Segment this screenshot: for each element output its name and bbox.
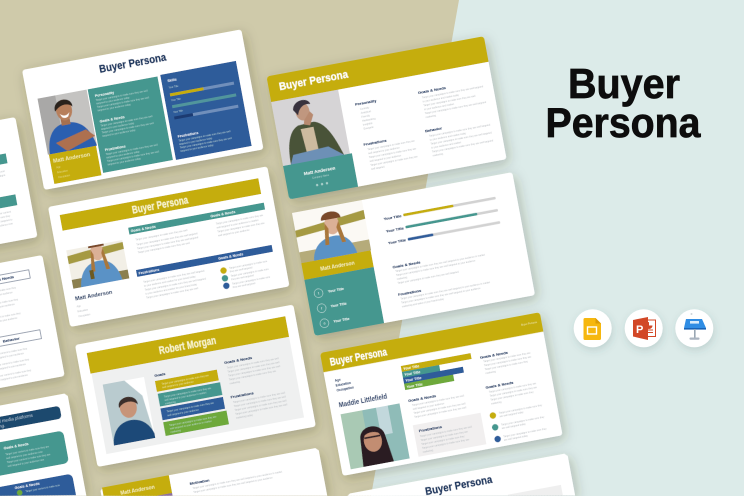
slide: gold header, man in jacket: [266, 36, 507, 199]
text: goals right top: Target your campaigns to make sure they: [485, 360, 529, 371]
goal box blue: well targeted to your audience: [167, 408, 200, 417]
text: goals lists: Target your campaigns to make sure they are well: [138, 242, 190, 254]
text: goals and needs: Goals & Needs: [224, 355, 253, 365]
photo: man in green jacket: [271, 90, 350, 166]
teal sidebar with social links: Your Title: [333, 317, 350, 324]
gray content panel: [91, 337, 304, 454]
text: frustrations: [143, 269, 208, 300]
panel: skills bars and frustrations: targeted to your audience today: [180, 144, 215, 153]
text: frustrations: Target your campaigns to make sure they are well targeted: [145, 277, 207, 292]
panel: frustrations: Target your campaigns to make sure they: [421, 435, 466, 446]
text: frustrations: Target your campaigns to make sure they are well: [233, 391, 286, 404]
goal box gold: well targeted to your audience: [162, 380, 195, 389]
panel: frustrations: marketing: [423, 449, 434, 454]
panel: skills bars and frustrations: Your Title: [168, 85, 179, 90]
panel: skills bars and frustrations: Frustrations: [177, 131, 199, 139]
header band with title: [60, 178, 261, 231]
goal box teal: [158, 382, 222, 407]
stacked bars: Your Title: [405, 376, 422, 383]
teal sidebar with social links: Your Title: [328, 287, 344, 294]
goal box green: well targeted to your audience in market: [170, 420, 212, 431]
slide: woman with hat, teal and blue bars: [48, 166, 289, 327]
panel: personality, goals, frustrations: targeted to your audience today: [107, 157, 142, 166]
name and details: Matt Anderson: [75, 290, 113, 303]
text: behavior: marketing: [433, 153, 444, 158]
text: personality: Curiosity: [360, 106, 370, 111]
text: goals and needs: marketing: [425, 114, 437, 119]
text: goals right bottom: Target your campaigns to make sure they are: [489, 386, 538, 398]
stacked bars: Your Title: [403, 364, 420, 371]
details: Education: [335, 381, 351, 388]
panel: frustrations: Frustrations: [418, 424, 443, 433]
panel: frustrations: [413, 413, 486, 457]
text: frustrations: Target your campaigns to make sure they are well: [234, 399, 287, 412]
text: personality: Analytical: [361, 110, 372, 115]
panel: personality, goals, frustrations: Target your campaigns to make sure they are well: [100, 115, 153, 128]
panel: personality, goals, frustrations: targeted to your audience today: [97, 103, 132, 112]
main title: [546, 60, 701, 146]
teal sidebar with social links: [304, 267, 384, 336]
main title: Buyer: [568, 60, 680, 107]
text: personality: [355, 98, 382, 131]
name band: [301, 250, 374, 280]
text: personality: Insightful: [363, 122, 373, 127]
text: frustrations: Target your campaigns to make sure they are well: [234, 395, 286, 408]
text: frustrations: Target your campaigns to make sure they are well: [235, 403, 288, 416]
panel: frustrations: Target your campaigns to make sure they are: [422, 438, 470, 450]
name block: Matt Anderson: [303, 165, 336, 176]
text: frustrations: Target your campaigns to make sure they are well: [146, 287, 199, 300]
icon: Keynote: [675, 309, 713, 347]
icon: PowerPoint: [625, 309, 663, 347]
heading: slide title: Buyer Persona: [329, 346, 389, 369]
text: frustrations: Target your campaigns to make sure they are well targeted: [143, 269, 205, 284]
slide: partial left card with rounded pills: [0, 393, 86, 496]
panel: skills bars and frustrations: Skills: [167, 77, 177, 83]
text: goals right top: [480, 346, 534, 376]
icon: Google Slides: [574, 309, 612, 347]
name band: [102, 475, 172, 496]
teal sidebar with social links: t: [318, 291, 319, 296]
panel: skills bars and frustrations: Target your campaigns to make sure they are well: [180, 137, 232, 150]
text: goals right bottom: [485, 376, 539, 406]
panel: personality, goals, frustrations: targeted to your audience today: [96, 96, 131, 105]
skill bars: Your Title: [383, 213, 403, 221]
header band: [320, 312, 543, 372]
text: goals right top: Target your campaigns to make sure they are: [484, 355, 532, 367]
text: goals and needs: Target your campaigns to make sure they are well targeted to your audience: [396, 259, 476, 277]
text: goals and needs: Target your campaigns to make sure they are well: [227, 357, 279, 370]
text: goals lists: Target your campaigns to make sure they are: [216, 214, 264, 226]
name and details: Education: [77, 308, 89, 313]
teal section bar: Goals & Needs: [130, 225, 156, 233]
text: behavior: to your audience and market: [431, 141, 462, 150]
text: frustrations: Target your campaigns to make sure they are well targeted to your audience in market: [400, 281, 491, 301]
slide: partial left card with rounded pills: well targeted to your audience now: [7, 458, 45, 468]
stacked bars: [401, 353, 475, 390]
name and details: Occupation: [78, 313, 91, 318]
text: goals and needs: Target your campaigns to make sure they are well targeted: [425, 101, 487, 115]
text: goals and needs center: Target your campaigns to make sure they are well: [414, 406, 467, 419]
slide: woman with teal sidebar and skill bars: [292, 172, 535, 336]
name band: Matt Anderson: [320, 260, 355, 273]
numbered list: Target your campaigns to make sure they: [501, 416, 545, 427]
slide: Maddie Littlefield: [320, 312, 563, 476]
skill bars: Your Title: [388, 237, 407, 246]
text: goals and needs: to your audience and market today: [422, 94, 460, 103]
panel: frustrations: Target your campaigns to make sure they are well: [420, 426, 473, 438]
text: goals and needs: [418, 78, 488, 120]
text: goals and needs center: [408, 388, 467, 419]
numbered list: they are well targeted: [230, 266, 253, 273]
goal box teal: well targeted to your audience in market: [164, 391, 207, 402]
text: motivation: [189, 464, 283, 494]
text: goals right top: Goals & Needs: [480, 350, 509, 360]
goal box green: [163, 410, 229, 436]
text: frustrations: Target your campaigns to make sure they are well targeted to your audience: [401, 287, 481, 305]
numbered list: Target your campaigns to make sure they: [499, 404, 543, 415]
skill bars: Your Title: [385, 225, 405, 233]
panel: personality, goals, frustrations: targeted to your audience today: [102, 129, 137, 138]
panel: skills bars and frustrations: targeted to your audience today: [179, 137, 213, 146]
text: frustrations: well targeted to your audience: [368, 146, 401, 155]
text: frustrations: Target your campaigns to make sure they are: [369, 147, 417, 159]
text: behavior: Target your campaigns to make sure they are well targeted: [432, 139, 494, 154]
slide: Robert Morgan: [75, 305, 316, 467]
panel: personality, goals, frustrations: Frustrations: [105, 144, 126, 152]
text: goals lists: Target your campaigns to make sure they are well targeted: [136, 232, 198, 247]
goal box blue: [160, 397, 225, 420]
goal box green: marketing: [170, 429, 182, 434]
numbered list: are well targeted today: [499, 411, 524, 418]
text: motivation: Motivation: [189, 477, 210, 486]
text: goals lists: Target your campaigns to make sure they are well: [135, 229, 188, 242]
main title: Persona: [546, 99, 701, 146]
details: Age: [334, 378, 341, 383]
name block: Occupation: [58, 174, 71, 179]
text: behavior: Behavior: [425, 125, 443, 133]
skill bars: [383, 196, 501, 246]
text: behavior: to your audience and market today: [430, 132, 467, 142]
text: goals lists: [135, 214, 267, 254]
text: personality: Energetic: [363, 126, 375, 131]
text: frustrations: well targeted to your audience: [369, 154, 402, 163]
name and details: Age: [76, 305, 82, 308]
text: goals and needs: [224, 350, 282, 386]
text: frustrations: well targeted: [371, 165, 385, 171]
text: goals and needs: to your audience and market: [424, 103, 455, 111]
photo strip: [156, 493, 173, 496]
goal box gold: [155, 370, 219, 392]
slide: partial left card with outlined boxes: Behavior: [2, 336, 20, 344]
text: goals and needs center: Goals & Needs: [408, 393, 437, 403]
panel: personality, goals, frustrations: Target your campaigns to make sure they are well: [96, 89, 148, 102]
text: goals and needs: Target your campaigns to make sure they are well targeted to your audience in market: [395, 254, 486, 273]
text: goals lists: well targeted to your audience in market: [216, 219, 259, 230]
panel: personality, goals, frustrations: Target your campaigns to make sure they are well: [102, 122, 154, 134]
goal box blue: Target your campaigns to make sure they are: [166, 402, 215, 413]
blue section bar: Goals & Needs: [218, 252, 244, 261]
small header caption: Buyer Persona: [521, 321, 538, 327]
stacked bars: Your Title: [406, 382, 423, 389]
text: goals and needs: marketing: [397, 276, 408, 281]
text: goals right bottom: marketing: [491, 401, 502, 406]
text: motivation: Target your campaigns to make sure they are well targeted to your audience: [193, 476, 274, 494]
slide: bottom right card: [347, 453, 575, 496]
text: goals lists: well targeted to your audience: [218, 229, 250, 237]
numbered list: are well targeted today: [502, 423, 527, 430]
teal sidebar with social links: o: [323, 321, 326, 326]
text: personality: Personality: [355, 98, 377, 107]
numbered list: Target your campaigns to make sure: [230, 268, 270, 278]
text: frustrations: Frustrations: [363, 138, 388, 147]
text: goals lists: Target your campaigns to make sure they are: [217, 222, 265, 234]
text: frustrations: Frustrations: [398, 288, 422, 297]
slide: partial left card with rounded pills: Goals & Needs: [14, 482, 40, 490]
header band with name: Robert Morgan: [158, 335, 217, 357]
goals heading: Goals: [154, 371, 167, 378]
blue section bar: [136, 245, 273, 277]
text: behavior: Target your campaigns to make sure they are well targeted: [430, 131, 493, 146]
slide: partial left card with rounded pills: Target your content to make sure they are: [7, 453, 51, 464]
numbered list: [220, 259, 272, 291]
slide: partial left card with rounded pills: Target your content to make sure they are: [5, 445, 50, 456]
name block: Matt Anderson: [53, 152, 91, 165]
text: goals and needs: Target your campaigns to make sure they are: [229, 370, 277, 382]
text: goals and needs center: well targeted to your audience: [413, 402, 445, 411]
numbered list: Target your campaigns to make sure they: [503, 427, 548, 438]
text: personality: Hardworking: [362, 117, 376, 123]
header band with name: [87, 316, 289, 374]
text: goals and needs: Target your campaigns to make sure they are well targeted: [422, 85, 484, 99]
text: frustrations: marketing today: [236, 414, 254, 420]
numbered list: they are well targeted: [231, 274, 255, 281]
text: frustrations: Target your campaigns to make sure they are: [367, 139, 416, 151]
name block: Age: [56, 165, 62, 169]
text: goals and needs: marketing: [229, 380, 241, 385]
slide: partial left card with teal bars: [0, 117, 38, 277]
name block: Company Name: [312, 174, 330, 180]
numbered list: Target your campaigns to make sure: [232, 276, 271, 286]
text: frustrations: to your audience and market for your brand today: [145, 283, 198, 296]
text: frustrations: Frustrations: [230, 390, 255, 399]
numbered list: they are well targeted: [233, 282, 256, 289]
teal sidebar with social links: f: [321, 307, 323, 311]
goal box teal: Target your campaigns to make sure they are: [164, 387, 212, 399]
slide: partial left card with outlined boxes: [0, 255, 65, 416]
panel: skills bars and frustrations: Target your campaigns to make sure they are well: [178, 130, 231, 143]
slide: partial left card with rounded pills: Goals & Needs: [3, 442, 29, 451]
panel: personality, goals, frustrations: [88, 76, 173, 173]
gray panel: [508, 485, 563, 496]
text: frustrations: to your audience and market for your brand today: [144, 275, 197, 288]
text: goals and needs: Goals & Needs: [392, 259, 422, 270]
panel: personality, goals, frustrations: targeted to your audience today: [106, 150, 141, 160]
name block: Education: [57, 169, 69, 174]
text: goals and needs center: Target your campaigns to make sure they are well: [412, 394, 465, 407]
text: goals right bottom: Target your campaigns to make sure they: [490, 391, 535, 402]
header band: [266, 36, 489, 102]
text: frustrations: [363, 133, 419, 171]
photo: laughing woman with hat: [65, 235, 129, 289]
text: goals and needs: Target your campaigns to make sure they are well: [228, 365, 281, 378]
text: goals and needs center: Target your campaigns to make sure they are well: [413, 402, 466, 415]
name block: [49, 146, 102, 184]
goal box gold: Target your campaigns to make sure they are: [161, 374, 210, 386]
slide: bottom card Matt Anderson motivation: [100, 448, 327, 496]
details: Occupation: [336, 385, 354, 393]
photo: woman with hat: [292, 200, 371, 263]
text: goals right bottom: Goals & Needs: [485, 380, 515, 390]
text: goals right top: marketing: [485, 370, 497, 375]
teal sidebar with social links: Your Title: [330, 302, 347, 308]
text: motivation: Target your campaigns to make sure they are well targeted to your audience in market: [192, 470, 283, 490]
text: goals right top: Target your campaigns to make sure they are: [483, 352, 531, 363]
panel: skills bars and frustrations: Your Title: [173, 109, 184, 114]
header band with title: Buyer Persona: [131, 194, 190, 217]
panel: personality, goals, frustrations: Target your campaigns to make sure they are well: [107, 150, 160, 163]
photo: woman with glasses: [341, 403, 410, 469]
heading: slide title: Buyer Persona: [278, 69, 350, 93]
goal box teal: marketing: [165, 401, 177, 406]
panel: personality, goals, frustrations: Target your campaigns to make sure they are well: [97, 96, 150, 109]
photo: man in navy sweater: [103, 377, 156, 446]
slide: man in blue shirt, teal and blue panels: [22, 29, 263, 190]
text: frustrations: [230, 385, 289, 420]
slide: partial left card with rounded pills: Target your content to make sure: [25, 484, 61, 493]
numbered list: are well targeted today: [504, 434, 529, 442]
text: frustrations: marketing and sales of your brand today: [402, 298, 445, 309]
name block: [283, 153, 358, 199]
stacked bars: Your Title: [404, 370, 421, 377]
text: frustrations: Target your campaigns to make sure they are: [370, 155, 419, 167]
teal section bar: [128, 203, 265, 235]
slide: partial left card with rounded pills: well targeted to your audience now: [6, 451, 43, 460]
panel: skills bars and frustrations: Your Title: [171, 97, 182, 102]
teal section bar: Goals & Needs: [210, 210, 236, 219]
text: goals and needs: Target your campaigns to make sure they are well targeted: [397, 271, 460, 285]
heading: slide title: Buyer Persona: [98, 51, 168, 76]
details: [334, 376, 354, 393]
numbered list: Target your campaigns to make sure: [229, 260, 268, 270]
panel: personality, goals, frustrations: Goals & Needs: [99, 115, 125, 124]
panel: skills bars and frustrations: [160, 61, 252, 160]
text: personality: Friendly: [361, 114, 371, 119]
text: goals and needs: Goals & Needs: [418, 85, 447, 95]
panel: personality, goals, frustrations: Personality: [95, 91, 114, 98]
text: goals right bottom: Target your campaigns to make sure they are: [489, 382, 537, 394]
panel: personality, goals, frustrations: targeted to your audience today: [101, 122, 135, 131]
text: goals and needs: Target your campaigns to make sure they are well: [227, 361, 280, 374]
text: goals and needs: [392, 248, 488, 285]
text: frustrations: [398, 275, 492, 309]
numbered list: [489, 403, 548, 444]
text: goals and needs: Target your campaigns to make sure they are well: [423, 95, 476, 107]
text: behavior: Target your campaigns to make sure they are well targeted: [429, 123, 491, 138]
blue section bar: Frustrations: [138, 268, 160, 276]
photo: smiling man arms crossed: [37, 90, 97, 155]
background: light mint diagonal panel: [371, 0, 744, 496]
icon: PowerPoint: P: [636, 324, 643, 336]
text: behavior: [425, 117, 495, 158]
goal box green: Target your campaigns to make sure they are: [169, 415, 217, 427]
text: goals lists: Target your campaigns to make sure they are well targeted: [137, 236, 199, 250]
name and details: [75, 290, 116, 318]
panel: personality, goals, frustrations: Target your campaigns to make sure they are well: [106, 143, 158, 156]
panel: frustrations: Target your campaigns to make sure they are: [420, 430, 469, 442]
name: Maddie Littlefield: [338, 394, 388, 409]
